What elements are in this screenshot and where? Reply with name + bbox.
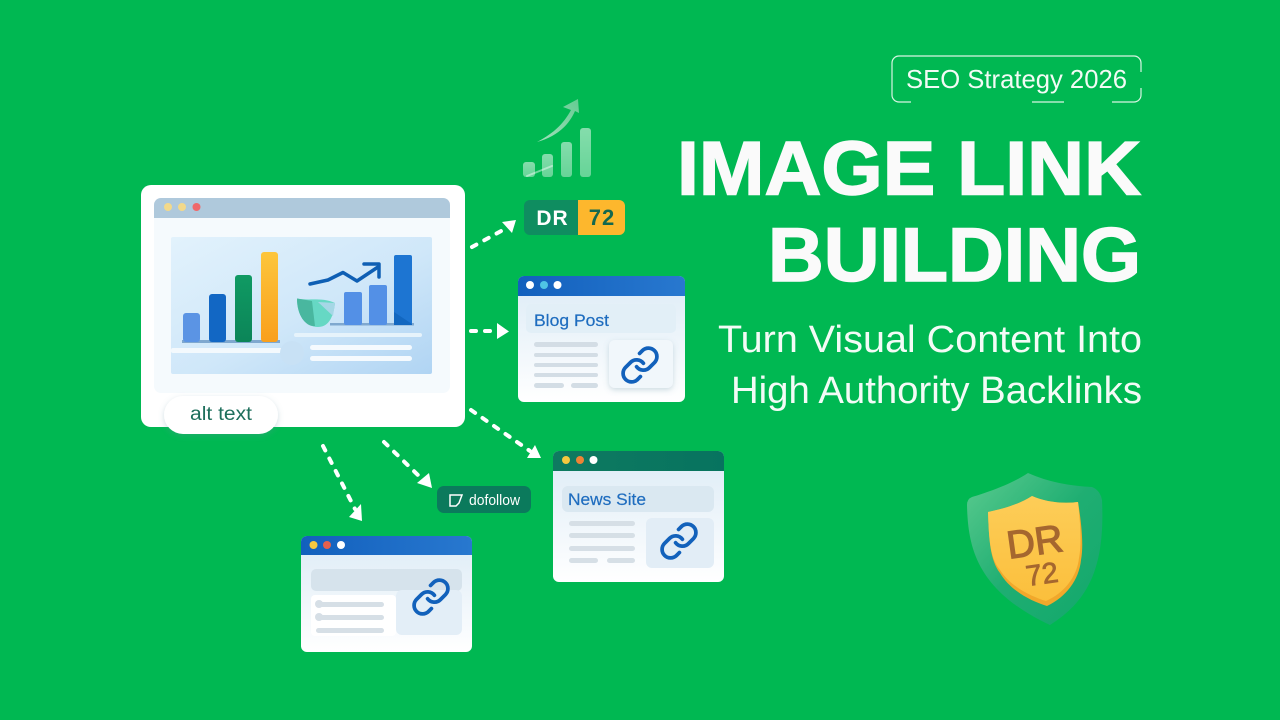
- category badge: SEO Strategy 2026: [906, 64, 1127, 94]
- arrow: to blog post: [471, 323, 509, 339]
- arrow: to dofollow chip: [384, 442, 432, 488]
- title: [677, 126, 1141, 298]
- window: news site: [553, 451, 724, 582]
- subtitle: High Authority Backlinks: [731, 370, 1142, 412]
- bottom window link card: [396, 580, 462, 635]
- chart panel: [171, 237, 432, 374]
- title: IMAGE LINK: [677, 126, 1141, 212]
- blog heading: Blog Post: [534, 311, 609, 330]
- main browser window with charts: [141, 185, 465, 427]
- alt text pill: [164, 396, 278, 434]
- blog title bar: [518, 276, 685, 296]
- arrow: to news site: [471, 410, 541, 458]
- subtitle: [718, 319, 1142, 412]
- DR 72 badge: DR: [536, 207, 569, 230]
- blog text lines: [534, 342, 598, 388]
- DR 72 badge: [524, 200, 625, 235]
- right bar chart with trend line: [310, 255, 414, 326]
- main window title bar: [154, 198, 450, 218]
- arrow: to DR badge: [472, 220, 516, 247]
- bottom window text lines: [315, 600, 384, 633]
- growth chart icon: [523, 99, 591, 177]
- DR 72 badge: 72: [589, 205, 615, 230]
- dofollow chip: dofollow: [469, 492, 520, 509]
- category badge: [892, 56, 1141, 102]
- window: unlabelled page: [301, 536, 472, 652]
- DR 72 shield: 72: [1024, 557, 1060, 593]
- news title bar: [553, 451, 724, 471]
- DR 72 shield: DR: [1004, 517, 1066, 568]
- news link card: [646, 518, 714, 568]
- dofollow chip: [437, 486, 531, 513]
- window: blog post: [518, 276, 685, 402]
- bottom window title bar: [301, 536, 472, 555]
- pie wedge: [297, 298, 335, 327]
- blog link card: [609, 340, 673, 388]
- news heading: News Site: [568, 490, 646, 509]
- alt text pill: alt text: [190, 404, 253, 425]
- news text lines: [569, 521, 635, 563]
- left bar chart: [183, 252, 278, 342]
- DR 72 shield: [967, 473, 1102, 625]
- title: BUILDING: [768, 213, 1141, 298]
- subtitle: Turn Visual Content Into: [718, 319, 1142, 361]
- arrow: to bottom window: [323, 446, 362, 521]
